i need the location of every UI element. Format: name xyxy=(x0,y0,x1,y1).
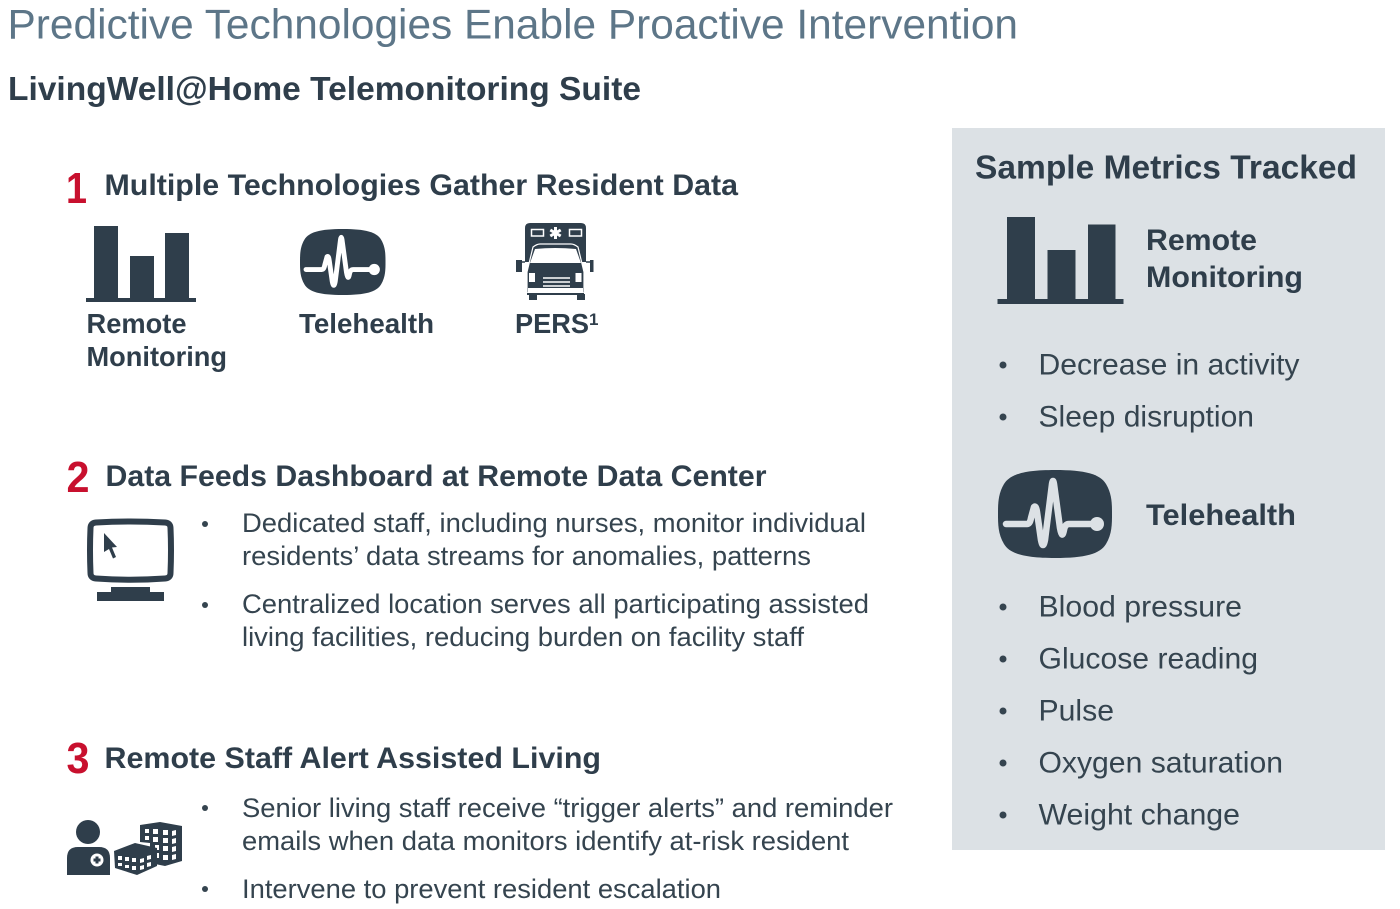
label: remote monitoring: Monitoring xyxy=(86,341,227,372)
bullet list: staff alert: emails when data monitors identify at-risk resident xyxy=(242,826,849,856)
section 2 heading: Data Feeds Dashboard at Remote Data Center xyxy=(106,460,767,493)
section 3 heading: Remote Staff Alert Assisted Living xyxy=(104,742,601,775)
title: Predictive Technologies Enable Proactive Intervention xyxy=(8,0,1018,48)
list: remote monitoring metrics xyxy=(1000,348,1300,434)
icon: computer monitor xyxy=(90,522,171,601)
label: remote monitoring: Remote xyxy=(86,308,186,339)
list: remote monitoring metrics: Decrease in activity xyxy=(1038,348,1300,382)
list: telehealth metrics: Glucose reading xyxy=(1038,642,1258,676)
label: telehealth: Telehealth xyxy=(1146,499,1296,532)
icon: remote monitoring bars xyxy=(998,217,1124,304)
icon: staff and buildings xyxy=(67,820,182,875)
section 3: staff alert xyxy=(66,734,893,904)
label: remote monitoring xyxy=(86,308,227,372)
section 1 heading: Multiple Technologies Gather Resident Data xyxy=(104,169,739,202)
bullet list: data center: Centralized location serves all participating assisted xyxy=(242,589,869,619)
subtitle: LivingWell@Home Telemonitoring Suite xyxy=(8,70,641,107)
list: telehealth metrics: Weight change xyxy=(1038,798,1240,832)
number 3: 3 xyxy=(66,734,90,783)
label: remote monitoring: Monitoring xyxy=(1146,261,1303,294)
list: telehealth metrics xyxy=(1000,590,1283,832)
label: remote monitoring: Remote xyxy=(1146,224,1257,257)
label: telehealth: Telehealth xyxy=(299,308,434,339)
section 1: multiple technologies xyxy=(66,164,739,372)
bullet list: staff alert: Senior living staff receive “trigger alerts” and reminder xyxy=(242,793,893,823)
panel: sample metrics tracked xyxy=(952,128,1385,850)
list: telehealth metrics: Oxygen saturation xyxy=(1038,746,1283,780)
bullet list: staff alert xyxy=(202,793,893,904)
bullet list: data center: living facilities, reducing burden on facility staff xyxy=(242,622,804,652)
icon: telehealth monitor xyxy=(998,470,1112,558)
icon: ambulance xyxy=(516,223,594,300)
list: remote monitoring metrics: Sleep disruption xyxy=(1038,400,1254,434)
list: telehealth metrics: Pulse xyxy=(1038,694,1114,728)
list: telehealth metrics: Blood pressure xyxy=(1038,590,1242,624)
bullet list: data center: Dedicated staff, including nurses, monitor individual xyxy=(242,508,866,538)
bullet list: data center: residents’ data streams for anomalies, patterns xyxy=(242,541,811,571)
label: PERS: 1 xyxy=(589,310,598,329)
panel heading: Sample Metrics Tracked xyxy=(975,150,1357,186)
icon: telehealth monitor xyxy=(300,229,386,295)
number 1: 1 xyxy=(66,164,87,213)
section 2: dashboard xyxy=(66,453,869,652)
label: PERS: PERS xyxy=(515,308,589,339)
icon: remote monitoring bars xyxy=(86,226,196,302)
number 2: 2 xyxy=(66,453,90,502)
bullet list: data center xyxy=(202,508,869,652)
bullet list: staff alert: Intervene to prevent resident escalation xyxy=(242,874,721,904)
label: remote monitoring xyxy=(1146,224,1303,294)
